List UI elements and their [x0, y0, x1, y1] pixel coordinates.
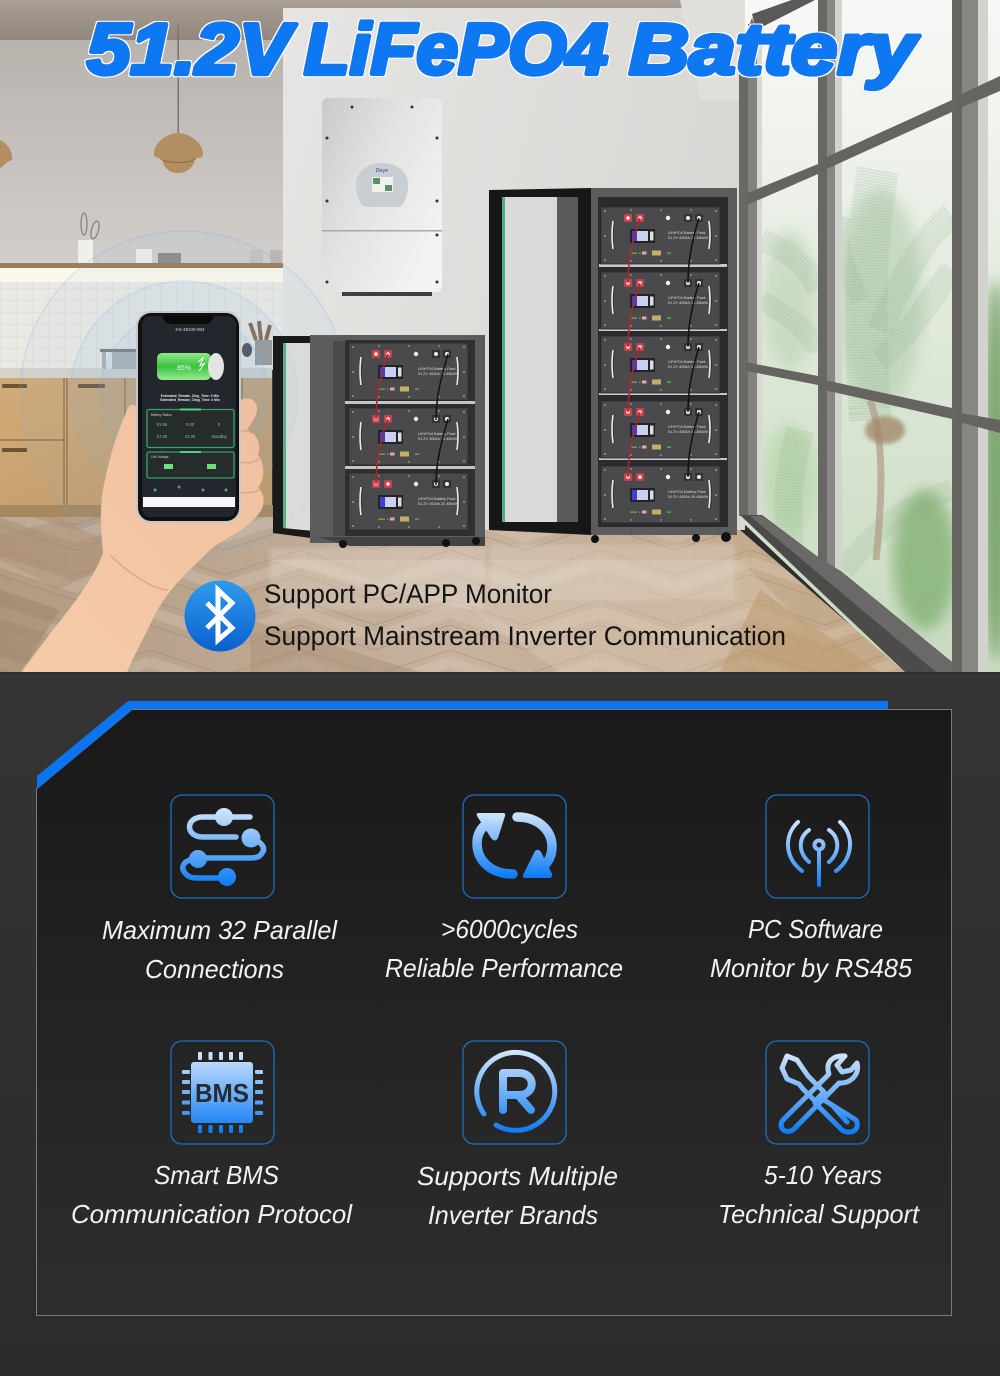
second pendant lamp edge	[0, 140, 12, 168]
label: Maximum 32 Parallel	[102, 915, 338, 945]
features panel	[36, 710, 952, 1316]
label: Supports Multiple	[417, 1161, 618, 1191]
cooking pot	[100, 349, 140, 369]
shelf items: utensil jar and cups	[78, 213, 282, 263]
battery module 1: 51.2V 400Ah 20.48kWh	[668, 236, 708, 240]
feature: technical support	[718, 1041, 921, 1229]
title	[87, 10, 921, 90]
icon: BMS chip: BMS	[195, 1078, 249, 1108]
app runtime text: Estimated_Remain_Disg_Time: 0 Min	[161, 394, 219, 398]
label	[102, 915, 338, 984]
battery module 2: LiFePO4 Battery Pack	[668, 296, 706, 300]
inverter: Deye	[376, 168, 388, 174]
feature: smart BMS	[71, 1041, 353, 1229]
cabinet body	[310, 335, 485, 543]
monitoring text: Support Mainstream Inverter Communication	[264, 621, 786, 651]
ceiling band	[0, 0, 1000, 42]
app battery status card	[147, 408, 234, 448]
tiled backsplash	[0, 268, 283, 370]
battery module 3	[601, 336, 720, 393]
app battery status card: 0.00	[186, 422, 195, 427]
battery module 2	[349, 408, 468, 465]
small battery cabinet	[273, 335, 485, 548]
label: Communication Protocol	[71, 1199, 353, 1229]
battery module 2: LiFePO4 Battery Pack	[418, 432, 456, 436]
app battery status card: 27.00	[157, 434, 168, 439]
battery module 3: LiFePO4 Battery Pack	[668, 360, 706, 364]
label: PC Software	[748, 914, 883, 944]
label	[417, 1161, 618, 1230]
cables	[628, 218, 699, 477]
smartphone with battery app: KS-48100-004	[175, 327, 205, 332]
cabinet body	[591, 188, 737, 535]
label	[71, 1160, 353, 1229]
app battery status card: Battery Status	[151, 413, 172, 417]
smartphone with battery app	[136, 311, 241, 523]
app battery gauge	[157, 353, 224, 380]
label: Monitor by RS485	[710, 953, 913, 983]
inverter	[322, 98, 442, 296]
window glass with palms	[740, 0, 1000, 672]
Bluetooth badge	[184, 580, 256, 652]
feature: PC software	[710, 795, 913, 983]
label: Reliable Performance	[385, 953, 623, 983]
hero photo: kitchen and battery room	[0, 0, 1000, 672]
app cell voltage card: Cell Voltage	[151, 455, 169, 459]
battery module 4	[601, 401, 720, 458]
centre wall	[283, 8, 745, 530]
app runtime text: Estimated_Remain_Chag_Time: 0 Min	[160, 398, 220, 402]
icon: crossed tools	[766, 1041, 869, 1144]
app battery status card: 0	[218, 422, 221, 427]
upper right wall	[680, 0, 790, 100]
battery module 2: 51.2V 400Ah 20.48kWh	[668, 301, 708, 305]
title: LiFePO4	[304, 10, 608, 90]
dark features section	[0, 673, 1000, 1376]
icon: parallel connections	[171, 795, 274, 898]
battery module 4: LiFePO4 Battery Pack	[668, 425, 706, 429]
app runtime text	[160, 394, 220, 402]
open glass door	[489, 188, 591, 535]
label	[718, 1160, 921, 1229]
feature: cycles	[385, 795, 623, 983]
large battery cabinet	[489, 188, 737, 543]
icon: BMS chip	[171, 1041, 274, 1144]
Bluetooth signal rings	[20, 231, 348, 559]
label	[385, 914, 623, 983]
battery module 3: 51.2V 400Ah 20.48kWh	[418, 502, 458, 506]
app cell voltage card	[147, 451, 234, 478]
battery module 1	[601, 207, 720, 264]
window frame	[739, 0, 1000, 672]
battery module 5: LiFePO4 Battery Pack	[668, 490, 706, 494]
cabinet wheels	[339, 537, 480, 548]
left kitchen wall	[0, 40, 283, 266]
battery module 2	[601, 272, 720, 329]
app battery status card: 51.56	[157, 422, 168, 427]
title: 51.2V	[87, 10, 297, 90]
battery module 3: 51.2V 400Ah 20.48kWh	[668, 365, 708, 369]
icon: antenna signal	[766, 795, 869, 898]
battery module 5: 51.2V 400Ah 20.48kWh	[668, 495, 708, 499]
label: Smart BMS	[154, 1160, 280, 1190]
title: Battery	[629, 10, 921, 90]
battery module 3	[349, 473, 468, 530]
feature: inverter brands	[417, 1041, 618, 1230]
battery module 2: 51.2V 400Ah 20.48kWh	[418, 437, 458, 441]
app battery gauge: 85%	[177, 365, 191, 372]
battery module 1	[349, 343, 468, 400]
cabinet wheels	[591, 532, 731, 543]
open glass door	[273, 336, 335, 541]
monitoring text	[264, 579, 786, 651]
battery module 5	[601, 466, 720, 523]
battery module 1: 51.2V 400Ah 20.48kWh	[418, 372, 458, 376]
cables	[376, 354, 448, 485]
countertop	[0, 368, 272, 378]
monitoring text: Support PC/APP Monitor	[264, 579, 552, 609]
battery module 4: 51.2V 400Ah 20.48kWh	[668, 430, 708, 434]
app navigation	[143, 486, 235, 507]
app battery status card: 24.00	[185, 434, 196, 439]
icon: registered R	[463, 1041, 566, 1144]
icon: cycle arrows	[463, 795, 566, 898]
battery module 3: LiFePO4 Battery Pack	[418, 497, 456, 501]
label: Connections	[145, 954, 284, 984]
floor	[0, 517, 905, 672]
blue corner accent bar	[37, 701, 888, 789]
hand holding phone	[22, 398, 264, 672]
pendant lamp	[154, 25, 203, 173]
wooden shelf	[0, 263, 283, 268]
label: Technical Support	[718, 1199, 921, 1229]
app battery status card: Standby	[211, 434, 228, 439]
battery module 1: LiFePO4 Battery Pack	[418, 367, 456, 371]
battery module 1: LiFePO4 Battery Pack	[668, 231, 706, 235]
label: Inverter Brands	[428, 1200, 598, 1230]
kitchen cabinets	[0, 376, 283, 518]
label: 5-10 Years	[764, 1160, 882, 1190]
label	[710, 914, 913, 983]
utensil holder	[242, 321, 272, 365]
feature: parallel connections	[102, 795, 338, 984]
label: >6000cycles	[441, 914, 578, 944]
